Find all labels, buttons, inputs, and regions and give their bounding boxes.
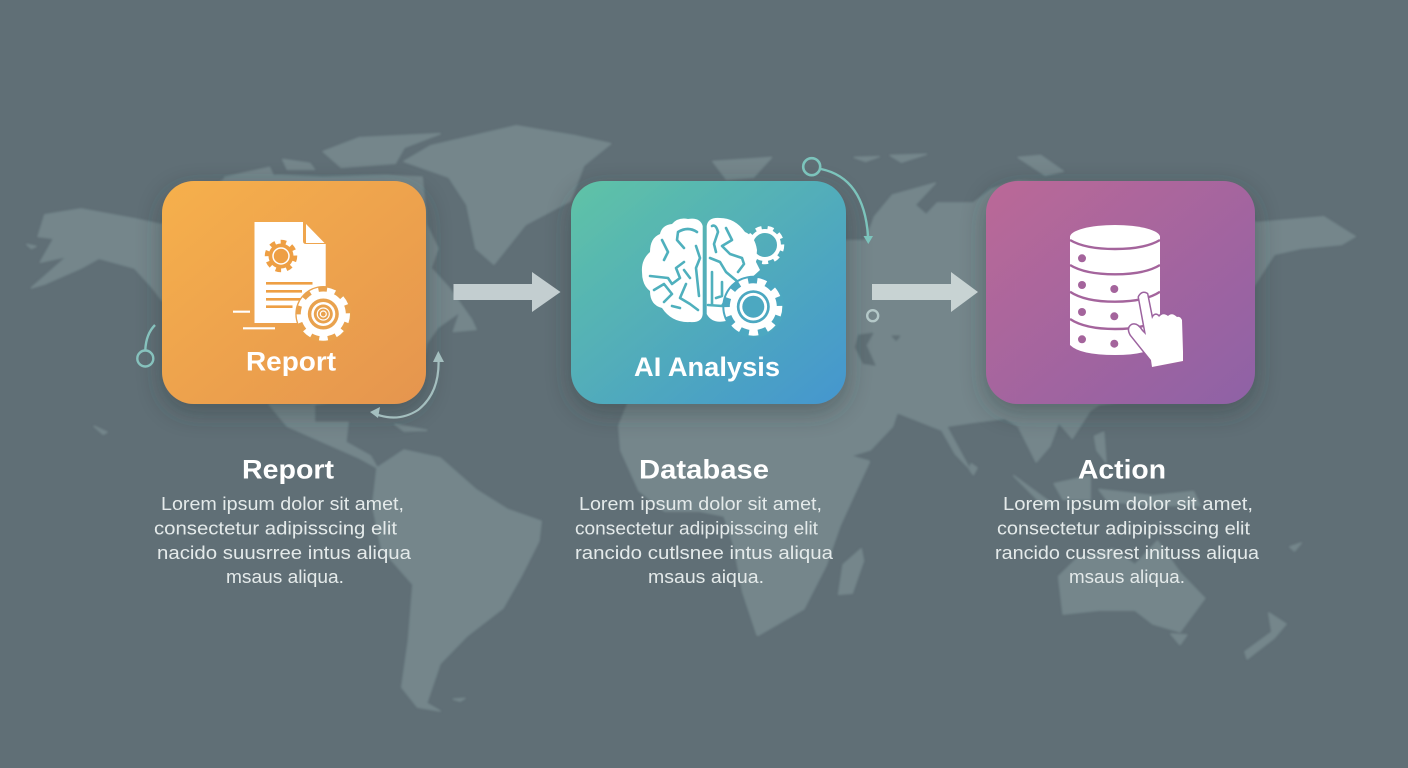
description: Database: rancido cutlsnee intus aliqua: [575, 542, 834, 563]
text block: Report: [154, 454, 412, 587]
map: Americas and Greenland: [27, 126, 611, 711]
description: Report: consectetur adipisscing elit: [154, 518, 397, 538]
map: Eurasia, Australia and islands: [713, 154, 1355, 659]
card: Action: [986, 181, 1255, 404]
decoration: top node with arrow: [803, 158, 873, 244]
arrow: AI Analysis to Action: [872, 272, 978, 312]
description: Report: Lorem ipsum dolor sit amet,: [161, 493, 404, 514]
description: Action: [995, 493, 1260, 587]
world map: [27, 126, 1355, 711]
decoration: left node: [137, 325, 155, 366]
description: Action: rancido cussrest inituss aliqua: [995, 542, 1260, 563]
description: Database: consectetur adipipisscing elit: [575, 518, 818, 538]
arrow: Report to AI Analysis: [454, 272, 560, 312]
card: AI Analysis: [571, 181, 846, 404]
card: Report: [162, 181, 426, 404]
heading: Report: Report: [242, 454, 334, 484]
icon: database with pointing hand: [1070, 225, 1183, 367]
map: inland seas: [856, 333, 899, 365]
description: Action: consectetur adipipisscing elit: [997, 518, 1250, 538]
card label: Report: Report: [246, 346, 336, 376]
card label: AI Analysis: AI Analysis: [634, 352, 780, 382]
heading: Action: Action: [1078, 454, 1166, 484]
icon: brain with gears: [642, 218, 784, 338]
description: Report: nacido suusrree intus aliqua: [157, 542, 412, 563]
decoration: small ring: [867, 310, 878, 321]
decoration: curved double arrow: [370, 351, 444, 418]
text block: Database: [575, 454, 834, 587]
description: Database: Lorem ipsum dolor sit amet,: [579, 493, 822, 514]
icon: document with gears: [233, 222, 351, 342]
description: Report: msaus aliqua.: [226, 566, 344, 587]
map: Africa: [620, 404, 868, 634]
description: Database: [575, 493, 834, 587]
description: Action: msaus aliqua.: [1069, 566, 1185, 587]
heading: Database: Database: [639, 454, 769, 484]
description: Action: Lorem ipsum dolor sit amet,: [1003, 493, 1253, 514]
description: Report: [154, 493, 412, 587]
description: Database: msaus aiqua.: [648, 566, 764, 587]
text block: Action: [995, 454, 1260, 587]
